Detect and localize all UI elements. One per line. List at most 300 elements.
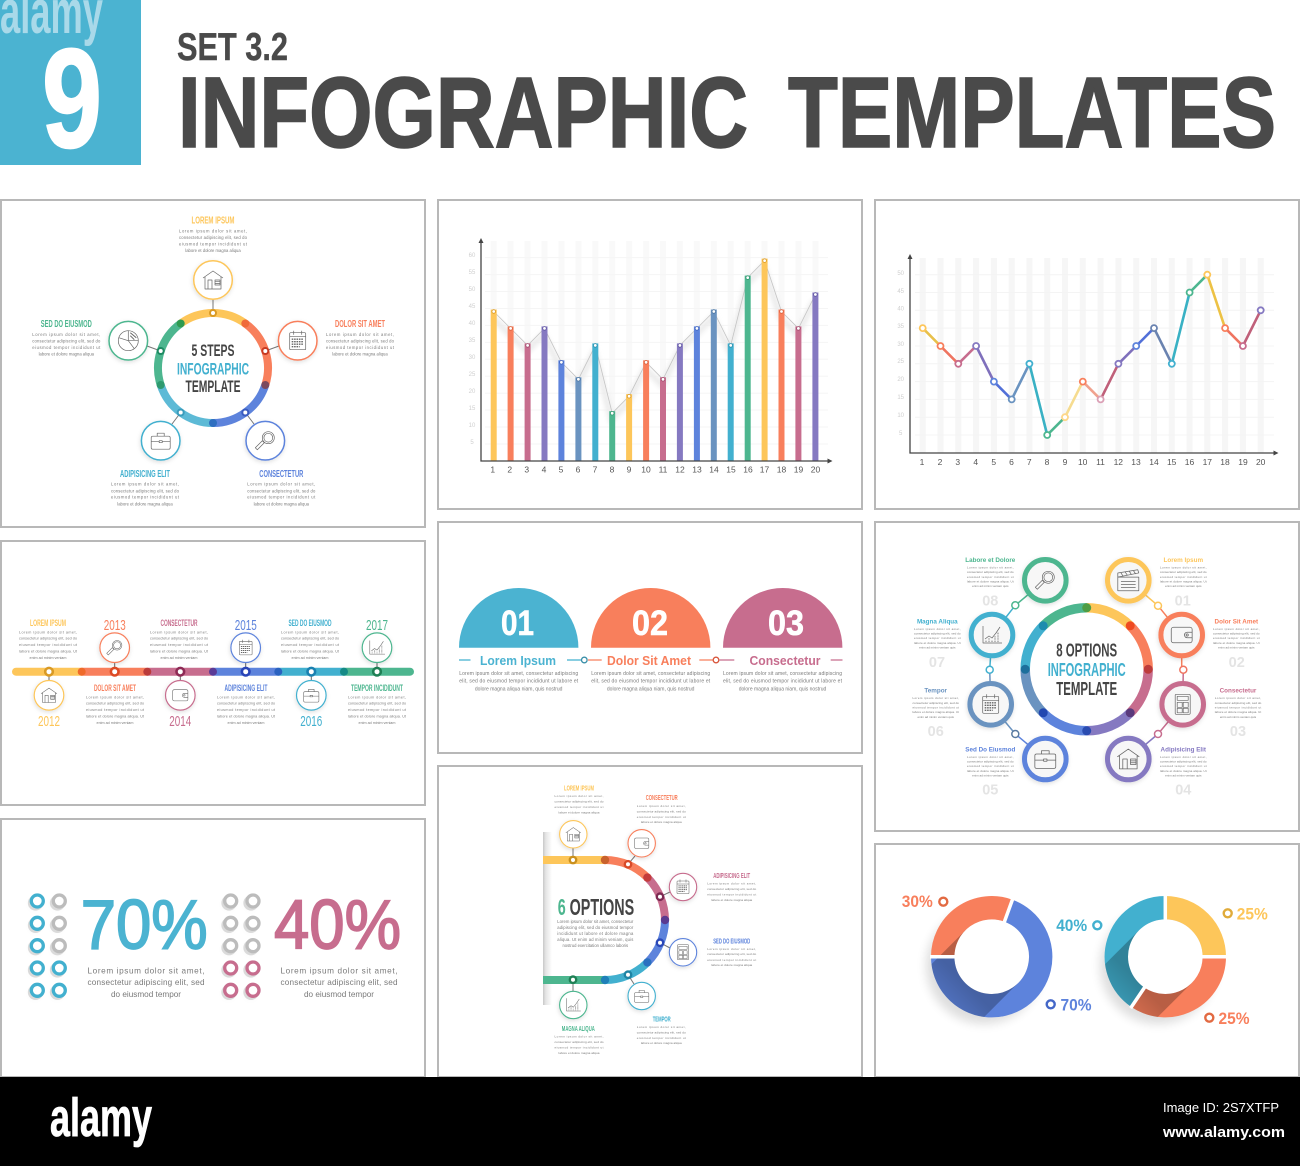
text: tempor incididunt: eiusmod tempor incididunt ut	[348, 708, 406, 712]
icon: chart 2017	[362, 633, 392, 662]
footer image id	[1162, 1100, 1285, 1141]
text: 70% description	[88, 966, 205, 999]
text: option 06: Tempor	[924, 688, 948, 694]
text: adipisicing elit	[111, 468, 180, 506]
x axis labels: 8	[1045, 457, 1050, 467]
text: sed do eiusmod: labore et dolore magna aliqua	[711, 963, 752, 967]
text: magna aliqua: MAGNA ALIQUA	[562, 1024, 595, 1033]
text: tempor incididunt	[348, 683, 406, 725]
text: dolor sit amet: dolore magna aliqua niam, quis nostrud	[607, 686, 695, 692]
timeline nodes	[45, 668, 381, 676]
text: option 03: 03	[1230, 724, 1246, 740]
text: adipisicing elit	[707, 871, 756, 902]
text: sed do eiusmod: eiusmod tempor incididunt ut	[281, 643, 339, 647]
text: lorem ipsum: LOREM IPSUM	[30, 618, 66, 628]
x axis labels: 10	[1078, 457, 1088, 467]
text: lorem ipsum: LOREM IPSUM	[564, 784, 594, 793]
label 25% yellow	[1224, 905, 1268, 923]
text: option 01: Lorem Ipsum	[1164, 557, 1203, 564]
text: consectetur: dolore magna aliqua niam, quis nostrud	[739, 686, 826, 692]
semicircle 01	[459, 588, 578, 648]
text: option 08: consectetur adipiscing elit, sed do	[967, 570, 1014, 574]
bars	[491, 259, 818, 461]
text: lorem ipsum: Lorem Ipsum	[480, 653, 556, 668]
centre text: 6 options: Lorem ipsum dolor sit amet, consectetur	[557, 919, 634, 924]
panel: 6 options half ring	[438, 766, 862, 1077]
panel: 5 steps circle	[1, 200, 425, 527]
icon: pie chart	[109, 321, 148, 360]
text: magna aliqua: consectetur adipiscing elit, sed do	[554, 1040, 604, 1044]
text: option 07: labore et dolore magna aliqua. Ut	[914, 641, 961, 645]
text: option 06: Lorem ipsum dolor sit amet,	[912, 696, 959, 700]
text: dolor sit amet	[86, 683, 144, 725]
text: option 03: labore et dolore magna aliqua. Ut	[1215, 710, 1261, 714]
x axis labels: 12	[1114, 457, 1123, 467]
title	[178, 57, 1276, 169]
x axis labels: 2	[938, 457, 943, 467]
icon: house	[560, 821, 587, 848]
icon: calculator 03	[1162, 684, 1203, 725]
text: lorem ipsum: eiusmod tempor incididunt ut	[179, 242, 248, 246]
label 25% yellow: 25%	[1237, 905, 1268, 923]
centre text: 8 OPTIONS	[1056, 640, 1117, 660]
text: option 02: 02	[1229, 655, 1245, 671]
text: tempor: eiusmod tempor incididunt ut	[637, 1036, 686, 1040]
text: 70% description: do eiusmod tempor	[111, 990, 181, 999]
text: consectetur: enim ad minim veniam	[161, 656, 197, 660]
text: 40% description	[280, 966, 398, 999]
text: lorem ipsum	[459, 653, 579, 692]
text: option 02: consectetur adipiscing elit, sed do	[1213, 632, 1260, 636]
y axis labels: 40	[897, 306, 905, 312]
text: consectetur	[247, 468, 316, 506]
text: dolor sit amet: elit, sed do eiusmod tempor incididunt ut labore et	[591, 679, 711, 685]
icon: magnifier 2013	[100, 633, 130, 662]
centre text: 5 STEPS	[192, 341, 234, 360]
y axis labels: 35	[897, 324, 905, 330]
years: 2013	[104, 617, 126, 634]
years: 2012	[38, 713, 60, 730]
text: option 07	[914, 618, 961, 671]
half ring band	[543, 856, 669, 984]
y axis labels: 25	[469, 372, 476, 378]
semicircle 03	[723, 588, 842, 648]
panel: three semicircles	[438, 522, 862, 753]
text: dolor sit amet	[326, 318, 395, 357]
text: adipisicing elit: Lorem ipsum dolor sit amet,	[217, 695, 275, 699]
text: option 03: consectetur adipiscing elit, sed do	[1215, 701, 1262, 705]
x axis labels: 17	[760, 464, 769, 474]
text: lorem ipsum: LOREM IPSUM	[192, 214, 235, 226]
x axis labels: 4	[973, 457, 978, 467]
y axis labels: 10	[897, 413, 905, 419]
text: dolor sit amet: labore et dolore magna aliqua. Ut	[86, 714, 144, 718]
x axis labels: 9	[1063, 457, 1068, 467]
x axis labels: 10	[641, 464, 651, 474]
x axis labels: 8	[610, 464, 615, 474]
text: consectetur: Consectetur	[750, 653, 820, 668]
band nodes	[570, 857, 663, 983]
text: adipisicing elit: labore et dolore magna aliqua	[711, 898, 752, 902]
text: option 01: Lorem ipsum dolor sit amet,	[1160, 565, 1207, 569]
text: sed do eiusmod	[281, 618, 339, 660]
text: lorem ipsum: labore et dolore magna aliqua. Ut	[19, 650, 77, 654]
panel: 8 options circle	[875, 522, 1299, 831]
label 40%: 40%	[1056, 917, 1088, 935]
text: option 06: enim ad minim veniam quis	[918, 715, 954, 719]
years: 2014	[169, 713, 191, 730]
text: consectetur: eiusmod tempor incididunt ut	[637, 815, 686, 819]
centre text: TEMPLATE	[186, 377, 240, 396]
text: consectetur: Lorem ipsum dolor sit amet,	[637, 804, 686, 808]
years: 2017	[366, 617, 388, 634]
x axis labels: 14	[709, 464, 719, 474]
text: tempor: consectetur adipiscing elit, sed do	[637, 1030, 686, 1034]
years: 2016	[300, 713, 322, 730]
text: consectetur	[150, 618, 208, 660]
donut chart 40/25/25	[1097, 896, 1226, 1027]
text: adipisicing elit: consectetur adipiscing elit, sed do	[707, 887, 756, 891]
donut chart 30/70	[911, 898, 1042, 1037]
dot grid 40%	[223, 895, 259, 998]
icon: magnifier 08	[1024, 560, 1066, 601]
text: dolor sit amet: eiusmod tempor incididunt ut	[326, 345, 395, 350]
text: option 05: enim ad minim veniam quis	[972, 773, 1009, 777]
text: lorem ipsum: Lorem ipsum dolor sit amet,	[19, 630, 77, 634]
y axis labels	[469, 253, 476, 446]
text: sed do eiusmod: labore et dolore magna aliqua. Ut	[281, 650, 339, 654]
x axis labels	[490, 464, 820, 474]
semicircle 01: 01	[501, 604, 534, 643]
text: adipisicing elit: labore et dolore magna aliqua	[117, 501, 173, 506]
icon: magnifier	[246, 421, 285, 460]
text: tempor incididunt: TEMPOR INCIDIDUNT	[351, 683, 403, 693]
centre text: INFOGRAPHIC	[177, 360, 249, 378]
badge: number 9: 9	[42, 19, 102, 177]
text: option 07: enim ad minim veniam quis	[919, 645, 956, 649]
years	[38, 617, 388, 730]
text: sed do eiusmod: SED DO EIUSMOD	[713, 936, 751, 945]
text: consectetur: elit, sed do eiusmod tempor incididunt ut labore et	[723, 679, 843, 685]
text: sed do eiusmod: labore et dolore magna aliqua	[39, 352, 95, 357]
text: option 03: Consectetur	[1220, 688, 1257, 694]
timeline bar	[16, 668, 410, 676]
y axis labels: 45	[469, 304, 476, 310]
text: adipisicing elit: enim ad minim veniam	[228, 721, 264, 725]
text: lorem ipsum	[554, 784, 604, 814]
x axis labels: 11	[659, 464, 668, 474]
icon: calendar	[278, 321, 317, 360]
x axis labels: 4	[542, 464, 547, 474]
text: sed do eiusmod: enim ad minim veniam	[292, 656, 328, 660]
text: adipisicing elit: consectetur adipiscing elit, sed do	[217, 702, 275, 706]
text: adipisicing elit: labore et dolore magna aliqua. Ut	[217, 714, 275, 718]
connectors with small circles	[986, 580, 1187, 759]
text: consectetur: Lorem ipsum dolor sit amet, consectetur adipiscing	[723, 671, 842, 677]
icon: calendar 2015	[231, 633, 260, 662]
y axis labels: 20	[897, 377, 905, 383]
text: option 01: eiusmod tempor incididunt ut	[1160, 575, 1207, 579]
text: dolor sit amet: consectetur adipiscing elit, sed do	[326, 338, 395, 344]
text: option 04: consectetur adipiscing elit, sed do	[1160, 760, 1207, 764]
text: sed do eiusmod: consectetur adipiscing elit, sed do	[281, 637, 339, 641]
icon: wallet 02	[1161, 614, 1202, 656]
x axis labels: 7	[593, 464, 598, 474]
y axis labels	[897, 271, 905, 437]
text: option 02: Dolor Sit Amet	[1215, 618, 1259, 626]
text: option 04: Lorem ipsum dolor sit amet,	[1160, 755, 1207, 759]
badge: number 9	[0, 0, 141, 177]
x axis labels: 15	[1167, 457, 1177, 467]
text: option 02: labore et dolore magna aliqua. Ut	[1213, 641, 1260, 645]
text: lorem ipsum: labore et dolore magna aliqua	[185, 248, 241, 253]
text: lorem ipsum: labore et dolore magna aliqua	[559, 810, 600, 814]
text: consectetur	[723, 653, 843, 692]
connector lines	[459, 657, 842, 663]
text: option 07: Lorem ipsum dolor sit amet,	[914, 627, 961, 631]
footer logo: alamy	[50, 1088, 152, 1148]
text: adipisicing elit: eiusmod tempor incididunt ut	[217, 708, 275, 712]
icon: wallet 2014	[166, 680, 195, 710]
x axis labels: 3	[524, 464, 529, 474]
text: lorem ipsum: Lorem ipsum dolor sit amet,	[554, 794, 604, 798]
text: option 01: enim ad minim veniam quis	[1165, 584, 1202, 588]
icon: chart	[560, 991, 587, 1019]
icon: house	[194, 261, 232, 299]
text: lorem ipsum	[19, 618, 77, 660]
icon: calendar	[669, 873, 697, 901]
text: tempor incididunt: enim ad minim veniam	[359, 721, 395, 725]
text: option 04: enim ad minim veniam quis	[1165, 773, 1202, 777]
text: option 06: labore et dolore magna aliqua. Ut	[912, 710, 959, 714]
centre text: 6 options: aliqua. Ut enim ad minim veniam, quis	[557, 937, 633, 942]
text: lorem ipsum	[179, 214, 248, 253]
panel: bar chart	[438, 200, 862, 509]
text: dolor sit amet: Dolor Sit Amet	[607, 653, 692, 668]
text: option 01	[1160, 557, 1207, 610]
text: dolor sit amet: Lorem ipsum dolor sit amet, consectetur adipiscing	[591, 671, 710, 677]
text: 70% description: consectetur adipiscing elit, sed	[88, 978, 205, 987]
text: option 08: enim ad minim veniam quis	[972, 584, 1009, 588]
text: tempor incididunt: Lorem ipsum dolor sit amet,	[348, 695, 406, 699]
text: dolor sit amet: DOLOR SIT AMET	[335, 318, 385, 330]
text: option 05: eiusmod tempor incididunt ut	[967, 764, 1014, 768]
icon: briefcase 05	[1024, 738, 1066, 780]
text: dolor sit amet	[591, 653, 711, 692]
header	[0, 0, 1276, 177]
text: consectetur: consectetur adipiscing elit, sed do	[637, 809, 686, 813]
y axis labels: 15	[897, 395, 905, 401]
x axis labels: 15	[726, 464, 736, 474]
text: sed do eiusmod: SED DO EIUSMOD	[288, 618, 332, 628]
text: consectetur: eiusmod tempor incididunt ut	[247, 495, 316, 500]
text: sed do eiusmod: Lorem ipsum dolor sit amet,	[32, 332, 100, 337]
text: sed do eiusmod: SED DO EIUSMOD	[41, 318, 92, 330]
centre text: 6 options	[557, 894, 634, 948]
text: option 08: Lorem ipsum dolor sit amet,	[967, 565, 1014, 569]
label 70%: 70%	[1060, 996, 1092, 1014]
x axis labels: 17	[1203, 457, 1212, 467]
x axis labels: 9	[627, 464, 632, 474]
icon: briefcase	[141, 421, 180, 460]
x axis labels: 18	[777, 464, 786, 474]
text: option 04: eiusmod tempor incididunt ut	[1160, 764, 1207, 768]
x axis labels: 5	[559, 464, 564, 474]
semicircle 03: 03	[768, 604, 804, 643]
centre text: 6 options: nostrud exercitation ullamco laboris	[562, 943, 628, 948]
text: option 01: labore et dolore magna aliqua. Ut	[1160, 579, 1207, 583]
text: adipisicing elit: Lorem ipsum dolor sit amet,	[707, 881, 756, 885]
text: sed do eiusmod: Lorem ipsum dolor sit amet,	[281, 630, 339, 634]
text: option 08: 08	[982, 594, 998, 610]
centre text: 6 options: 6 OPTIONS	[558, 894, 634, 920]
text: option 04: 04	[1175, 782, 1191, 798]
centre text: TEMPLATE	[1056, 678, 1117, 699]
data points	[920, 272, 1264, 438]
text: magna aliqua: labore et dolore magna aliqua	[559, 1051, 600, 1055]
text: 40% description: do eiusmod tempor	[304, 990, 374, 999]
text: magna aliqua: eiusmod tempor incididunt ut	[554, 1045, 604, 1049]
y axis labels: 40	[469, 321, 476, 327]
text: adipisicing elit: consectetur adipiscing elit, sed do	[111, 488, 180, 493]
text: dolor sit amet: DOLOR SIT AMET	[94, 683, 136, 693]
text: consectetur: labore et dolore magna aliqua	[254, 501, 310, 506]
y axis labels: 55	[469, 270, 476, 276]
footer image id: Image ID: 2S7XTFP	[1163, 1100, 1279, 1115]
multicolour line	[923, 275, 1261, 435]
text: lorem ipsum: eiusmod tempor incididunt ut	[19, 643, 77, 647]
text: option 07: 07	[929, 655, 945, 671]
text: tempor	[637, 1014, 686, 1045]
x axis labels: 20	[811, 464, 820, 474]
x axis labels: 19	[794, 464, 803, 474]
text: option 01: 01	[1175, 594, 1191, 610]
icon: calculator	[669, 939, 697, 966]
text: option 04: labore et dolore magna aliqua. Ut	[1160, 769, 1207, 773]
text: dolor sit amet: Lorem ipsum dolor sit amet,	[86, 695, 144, 699]
text: option 02	[1213, 618, 1260, 671]
x axis labels: 14	[1149, 457, 1159, 467]
icon: clapperboard 01	[1108, 560, 1149, 601]
x axis labels: 1	[490, 464, 495, 474]
x axis labels: 13	[1131, 457, 1141, 467]
text: dolor sit amet: consectetur adipiscing elit, sed do	[86, 702, 144, 706]
text: 40% description: Lorem ipsum dolor sit amet,	[280, 966, 398, 976]
text: option 06: eiusmod tempor incididunt ut	[912, 705, 959, 709]
icon: briefcase 2016	[296, 680, 326, 710]
text: option 03	[1215, 688, 1262, 740]
text: option 08: labore et dolore magna aliqua. Ut	[967, 579, 1014, 583]
text: dolor sit amet: eiusmod tempor incididunt ut	[86, 708, 144, 712]
text: consectetur: CONSECTETUR	[646, 793, 678, 802]
text: option 04: Adipisicing Elit	[1161, 746, 1207, 754]
text: adipisicing elit	[217, 683, 275, 725]
text: lorem ipsum: eiusmod tempor incididunt ut	[554, 805, 604, 809]
y axis labels: 20	[469, 389, 476, 395]
text: lorem ipsum: Lorem ipsum dolor sit amet,	[179, 228, 247, 234]
text: dolor sit amet: Lorem ipsum dolor sit amet,	[326, 332, 394, 337]
x axis labels: 7	[1027, 457, 1032, 467]
semicircle 02	[591, 588, 710, 648]
text: option 05	[965, 746, 1015, 798]
panel: donut charts	[875, 844, 1299, 1077]
text: magna aliqua: Lorem ipsum dolor sit amet,	[554, 1034, 604, 1038]
text: adipisicing elit: ADIPISICING ELIT	[224, 683, 268, 693]
x axis labels: 3	[955, 457, 960, 467]
text: tempor: TEMPOR	[653, 1014, 671, 1023]
text: option 01: consectetur adipiscing elit, sed do	[1160, 570, 1207, 574]
value 40%: 40%	[274, 886, 401, 964]
text: consectetur: CONSECTETUR	[160, 618, 198, 628]
text: tempor incididunt: labore et dolore magna aliqua. Ut	[348, 714, 406, 718]
text: option 05: 05	[982, 782, 998, 798]
text: sed do eiusmod	[707, 936, 756, 967]
text: option 07: eiusmod tempor incididunt ut	[914, 636, 961, 640]
x axis labels: 18	[1220, 457, 1230, 467]
text: consectetur: labore et dolore magna aliqua. Ut	[150, 650, 208, 654]
text: lorem ipsum: dolore magna aliqua niam, quis nostrud	[475, 686, 563, 692]
x axis labels: 13	[692, 464, 702, 474]
icon: chart 07	[971, 614, 1013, 656]
semicircle 02: 02	[632, 604, 668, 643]
text: sed do eiusmod: eiusmod tempor incididunt ut	[707, 958, 756, 962]
x axis labels: 1	[920, 457, 925, 467]
title: INFOGRAPHIC	[178, 57, 748, 169]
centre text: INFOGRAPHIC	[1048, 659, 1126, 680]
panel: percent statistics	[1, 819, 425, 1077]
text: dolor sit amet: labore et dolore magna aliqua	[332, 352, 388, 357]
text: option 05: consectetur adipiscing elit, sed do	[967, 760, 1014, 764]
subtitle: SET 3.2	[177, 26, 288, 69]
text: consectetur: CONSECTETUR	[259, 468, 304, 480]
text: tempor incididunt: consectetur adipiscing elit, sed do	[348, 702, 406, 706]
text: lorem ipsum: enim ad minim veniam	[30, 656, 66, 660]
footer bar	[0, 1077, 1300, 1166]
footer image id: www.alamy.com	[1162, 1124, 1285, 1141]
text: adipisicing elit: eiusmod tempor incididunt ut	[111, 495, 180, 500]
y axis labels: 10	[469, 423, 476, 429]
label 25% orange: 25%	[1218, 1010, 1250, 1028]
text: consectetur: Lorem ipsum dolor sit amet,	[150, 630, 208, 634]
text: tempor: Lorem ipsum dolor sit amet,	[637, 1025, 686, 1029]
axes	[908, 254, 1278, 456]
text: 40% description: consectetur adipiscing elit, sed	[280, 978, 398, 987]
step nodes	[158, 310, 268, 416]
text: consectetur: Lorem ipsum dolor sit amet,	[247, 482, 315, 487]
text: 70% description: Lorem ipsum dolor sit amet,	[88, 966, 204, 976]
axes	[478, 238, 832, 464]
centre text	[1048, 640, 1126, 699]
text: option 05: labore et dolore magna aliqua. Ut	[967, 769, 1014, 773]
x axis labels: 12	[675, 464, 685, 474]
text: option 08	[965, 557, 1016, 610]
text: option 03: eiusmod tempor incididunt ut	[1215, 705, 1261, 709]
text: option 04	[1160, 746, 1207, 798]
text: adipisicing elit: eiusmod tempor incididunt ut	[707, 892, 756, 896]
y axis labels: 15	[469, 406, 476, 412]
y axis labels: 25	[897, 359, 905, 365]
text: sed do eiusmod: Lorem ipsum dolor sit amet,	[707, 947, 756, 951]
y axis labels: 60	[469, 253, 476, 259]
text: option 03: enim ad minim veniam quis	[1220, 715, 1257, 719]
value 70%: 70%	[81, 886, 208, 964]
icon: wallet	[628, 830, 655, 857]
text: lorem ipsum: consectetur adipiscing elit, sed do	[19, 637, 77, 641]
y axis labels: 5	[899, 431, 903, 437]
centre text: 6 options: incididunt ut labore et dolore magna	[557, 931, 634, 936]
x axis labels: 11	[1096, 457, 1105, 467]
text: option 07: consectetur adipiscing elit, sed do	[914, 632, 961, 636]
